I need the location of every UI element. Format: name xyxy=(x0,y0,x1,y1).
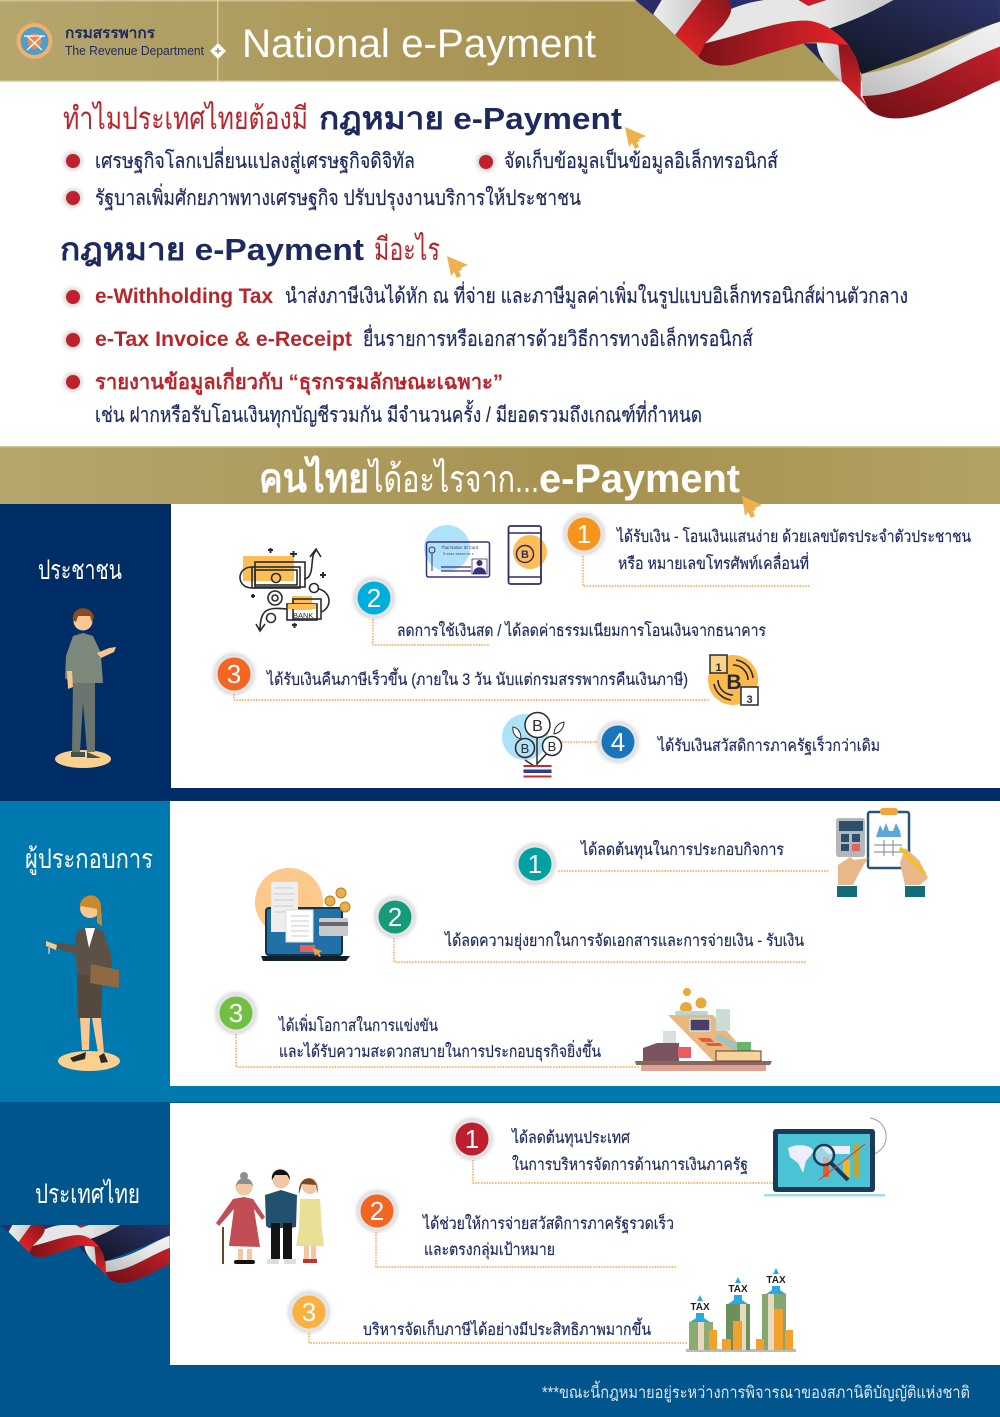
panel: entrepreneurs xyxy=(0,801,1000,1102)
icon: laptop with documents xyxy=(255,868,350,961)
callout 4: welfare: 4 xyxy=(611,727,625,757)
icon: bitcoin calendar: B xyxy=(726,671,742,694)
icon: money and bank card xyxy=(240,548,329,631)
callout 2: faster welfare: 2 xyxy=(370,1196,384,1226)
illustration: family xyxy=(216,1170,324,1264)
icon: tax money stacks xyxy=(686,1268,796,1352)
icon: tax money stacks: TAX xyxy=(766,1275,786,1286)
icon: national ID card xyxy=(424,525,490,577)
callout 4: welfare xyxy=(562,722,880,762)
icon: phone with bitcoin: B xyxy=(521,549,529,561)
heading: why Thailand needs the e-Payment law: กฎหมาย e-Payment xyxy=(319,101,622,136)
Thai flag ribbon, side xyxy=(0,1225,170,1283)
icon: money and bank card: BANK xyxy=(293,611,313,620)
callout 2: less paperwork xyxy=(375,897,806,962)
icon: tax money stacks: TAX xyxy=(728,1284,748,1295)
icon: tax money stacks: TAX xyxy=(690,1302,710,1313)
Thai flag ribbon, header xyxy=(635,0,1000,118)
bullet list: reasons: เศรษฐกิจโลกเปลี่ยนแปลงสู่เศรษฐกิจดิจิทัล xyxy=(95,146,415,174)
callout 1: money transfer: 1 xyxy=(577,519,591,549)
callout 1: lower national costs xyxy=(452,1119,773,1183)
figure: businesswoman xyxy=(46,895,120,1071)
label: entrepreneurs: ผู้ประกอบการ xyxy=(25,844,153,875)
header band xyxy=(0,0,1000,82)
callout 1: lower costs xyxy=(515,840,829,884)
benefits banner: e-Payment xyxy=(539,457,740,501)
icon: bitcoin calendar: 3 xyxy=(746,694,753,706)
icon: bitcoin tree with flag xyxy=(502,712,564,778)
icon: monitor with chart xyxy=(764,1118,886,1196)
callout 3: faster tax refund: ได้รับเงินคืนภาษีเร็วขึ้น (ภายใน 3 วัน นับแต่กรมสรรพากรคืนเงินภาษี) xyxy=(265,667,688,689)
callout 2: less paperwork: 2 xyxy=(388,902,402,932)
bullet list: law contents: ยื่นรายการหรือเอกสารด้วยวิธีการทางอิเล็กทรอนิกส์ xyxy=(363,324,753,351)
bullet list: law contents: เช่น ฝากหรือรับโอนเงินทุกบัญชีรวมกัน มีจำนวนครั้ง / มียอดรวมถึงเกณฑ์ที่กำหนด xyxy=(95,400,702,428)
callout 3: tax collection: 3 xyxy=(302,1297,316,1327)
heading: why Thailand needs the e-Payment law xyxy=(63,101,622,136)
label: Thailand: ประเทศไทย xyxy=(35,1179,140,1209)
callout 3: tax collection xyxy=(289,1292,688,1343)
bullet list: law contents xyxy=(64,281,908,428)
callout 2: less cash: ลดการใช้เงินสด / ได้ลดค่าธรรมเนียมการโอนเงินจากธนาคาร xyxy=(397,621,766,640)
icon: bitcoin calendar xyxy=(708,655,758,706)
icon: phone with bitcoin xyxy=(508,526,547,584)
callout 3: faster tax refund xyxy=(214,654,710,700)
callout 2: less cash xyxy=(354,578,766,645)
callout 2: faster welfare xyxy=(357,1191,676,1267)
callout 1: lower national costs: ได้ลดต้นทุนประเทศ xyxy=(510,1128,630,1148)
callout 3: competitiveness: และได้รับความสะดวกสบายในการประกอบธุรกิจยิ่งขึ้น xyxy=(279,1039,601,1062)
icon: gold cursor on banner xyxy=(742,496,762,518)
bullet list: law contents: e-Withholding Tax xyxy=(95,285,273,308)
heading: why Thailand needs the e-Payment law: ทำไมประเทศไทยต้องมี xyxy=(63,101,308,136)
benefits banner: ได้อะไรจาก... xyxy=(367,458,539,501)
benefits banner xyxy=(0,446,1000,504)
callout 2: less cash: 2 xyxy=(367,583,381,613)
callout 3: competitiveness xyxy=(216,993,640,1067)
figure: man xyxy=(55,608,116,768)
callout 3: faster tax refund: 3 xyxy=(227,659,241,689)
icon: gold cursor xyxy=(625,127,646,149)
heading: what the e-Payment law contains: กฎหมาย e-Payment xyxy=(60,232,364,267)
icon: national ID card: 3 xxxx xxxxx xx x xyxy=(443,551,474,556)
callout 2: less paperwork: ได้ลดความยุ่งยากในการจัดเอกสารและการจ่ายเงิน - รับเงิน xyxy=(443,931,804,951)
panel: Thailand xyxy=(0,1102,1000,1417)
callout 1: money transfer xyxy=(564,514,971,586)
title: National e-Payment xyxy=(242,22,596,66)
panel: citizens xyxy=(0,504,1000,801)
heading: what the e-Payment law contains: มีอะไร xyxy=(374,232,440,267)
label: citizens: ประชาชน xyxy=(38,555,122,585)
icon: bitcoin tree with flag: B xyxy=(521,741,529,756)
callout 1: lower national costs: 1 xyxy=(465,1124,479,1154)
bullet list: reasons xyxy=(64,146,778,211)
benefits banner: คนไทย xyxy=(259,455,369,501)
callout 1: lower national costs: ในการบริหารจัดการด้านการเงินภาครัฐ xyxy=(512,1155,748,1174)
callout 2: faster welfare: และตรงกลุ่มเป้าหมาย xyxy=(424,1241,555,1260)
icon: national ID card: Thai Nation ID Card xyxy=(441,545,479,550)
icon: bitcoin tree with flag: B xyxy=(532,718,543,735)
icon: bitcoin calendar: 1 xyxy=(715,662,722,674)
bullet list: law contents: รายงานข้อมูลเกี่ยวกับ “ธุรกรรมลักษณะเฉพาะ” xyxy=(95,366,503,396)
callout 1: lower costs: ได้ลดต้นทุนในการประกอบกิจการ xyxy=(579,840,784,860)
bullet list: reasons: จัดเก็บข้อมูลเป็นข้อมูลอิเล็กทรอนิกส์ xyxy=(504,147,778,174)
icon: cash register xyxy=(635,988,772,1071)
icon: calculator and clipboard xyxy=(836,808,928,897)
callout 3: competitiveness: 3 xyxy=(229,998,243,1028)
department name: กรมสรรพากร xyxy=(65,25,156,42)
callout 1: money transfer: หรือ หมายเลขโทรศัพท์เคลื่อนที่ xyxy=(618,552,809,573)
department name xyxy=(65,25,204,58)
callout 3: competitiveness: ได้เพิ่มโอกาสในการแข่งขัน xyxy=(277,1014,438,1035)
callout 2: faster welfare: ได้ช่วยให้การจ่ายสวัสดิการภาครัฐรวดเร็ว xyxy=(421,1213,674,1233)
callout 1: lower costs: 1 xyxy=(528,849,542,879)
callout 3: tax collection: บริหารจัดเก็บภาษีได้อย่างมีประสิทธิภาพมากขึ้น xyxy=(363,1317,651,1339)
bullet list: reasons: รัฐบาลเพิ่มศักยภาพทางเศรษฐกิจ ปรับปรุงงานบริการให้ประชาชน xyxy=(95,183,581,211)
logo: Revenue Department seal xyxy=(16,23,52,59)
icon: gold cursor xyxy=(447,256,468,278)
diamond connector icon xyxy=(210,43,226,59)
callout 4: welfare: ได้รับเงินสวัสดิการภาครัฐเร็วกว่าเดิม xyxy=(656,735,880,755)
bullet list: law contents: e-Tax Invoice & e-Receipt xyxy=(95,328,352,351)
department name: The Revenue Department xyxy=(65,44,204,58)
icon: bitcoin tree with flag: B xyxy=(548,739,556,754)
